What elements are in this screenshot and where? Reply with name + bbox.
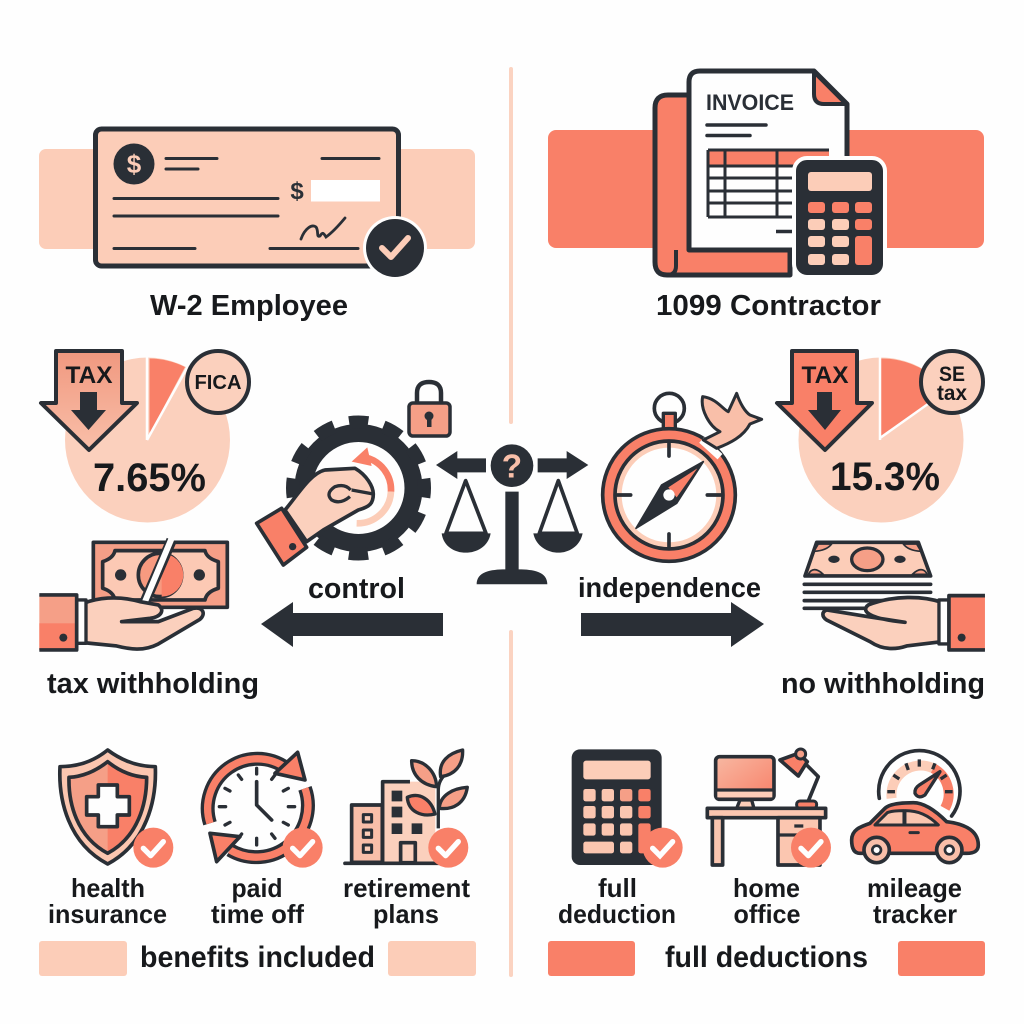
label: control: control	[308, 573, 405, 605]
arrow: pointing left	[261, 602, 443, 647]
panel: 1099 header band	[548, 130, 984, 248]
icon: paycheck: $	[127, 149, 142, 179]
label: retirement plans: plans	[373, 899, 439, 929]
icon: invoice and calculator	[655, 71, 885, 277]
badge: FICA	[187, 351, 249, 413]
badge: SE tax: SE	[939, 363, 965, 386]
icon: deduction calculator	[572, 749, 683, 868]
label: retirement plans	[343, 873, 470, 929]
chart: FICA pie 7.65 percent	[41, 351, 249, 522]
icon: balance scale with question mark: ?	[502, 448, 522, 485]
icon: paid time off clock	[208, 752, 323, 868]
icon: home office desk	[707, 749, 831, 868]
arrow: pointing right	[581, 602, 764, 647]
label: paid time off	[211, 873, 304, 929]
chart: FICA pie 7.65 percent: 7.65%	[93, 456, 206, 500]
label: mileage tracker	[867, 873, 962, 929]
icon: hand turning gear	[257, 422, 424, 565]
icon: mileage tracker car and gauge	[852, 751, 978, 863]
badge: SE tax	[921, 351, 983, 413]
icon: padlock	[409, 382, 450, 436]
heading: 1099 Contractor: 1099 Contractor	[656, 290, 881, 322]
label: retirement plans: retirement	[343, 873, 470, 903]
icon: split bill over hand	[39, 538, 227, 650]
label: home office: office	[734, 899, 800, 929]
label: mileage tracker: mileage	[867, 873, 962, 903]
label: home office	[733, 873, 800, 929]
icon: health shield	[60, 750, 173, 868]
label: tax withholding: tax withholding	[47, 668, 259, 700]
banner: benefits included: benefits included	[140, 941, 375, 974]
icon: paycheck: $	[290, 178, 304, 205]
label: independence: independence	[578, 572, 761, 603]
badge: SE tax: tax	[937, 382, 967, 405]
label: full deduction: deduction	[558, 899, 676, 929]
label: health insurance: insurance	[48, 899, 167, 929]
icon: cash stack on hand	[804, 542, 985, 650]
banner: benefits included	[39, 941, 476, 976]
banner: full deductions: full deductions	[665, 941, 868, 974]
icon: invoice and calculator: INVOICE	[706, 90, 794, 115]
label: health insurance: health	[71, 873, 145, 903]
icon: tax arrow left: TAX	[66, 362, 112, 389]
icon: paycheck	[96, 129, 427, 280]
banner: full deductions	[548, 941, 985, 976]
label: home office: home	[733, 873, 800, 903]
label: full deduction: full	[598, 873, 637, 903]
icon: retirement plans building and plant	[345, 750, 468, 868]
chart: SE tax pie 15.3 percent: 15.3%	[830, 455, 940, 499]
label: paid time off: time off	[211, 899, 304, 929]
label: mileage tracker: tracker	[873, 899, 957, 929]
icon: tax arrow right: TAX	[802, 362, 848, 389]
chart: SE tax pie 15.3 percent	[777, 351, 983, 522]
label: health insurance	[48, 873, 167, 929]
icon: compass stopwatch with bird	[603, 393, 762, 561]
label: paid time off: paid	[232, 873, 282, 903]
heading: W-2 Employee: W-2 Employee	[150, 290, 348, 322]
label: no withholding: no withholding	[781, 668, 985, 700]
icon: tax arrow right	[777, 351, 872, 450]
icon: balance scale with question mark	[436, 444, 588, 584]
badge: FICA: FICA	[194, 372, 242, 394]
icon: tax arrow left	[41, 351, 137, 450]
panel: W-2 header band	[39, 149, 475, 249]
label: full deduction	[558, 873, 676, 929]
